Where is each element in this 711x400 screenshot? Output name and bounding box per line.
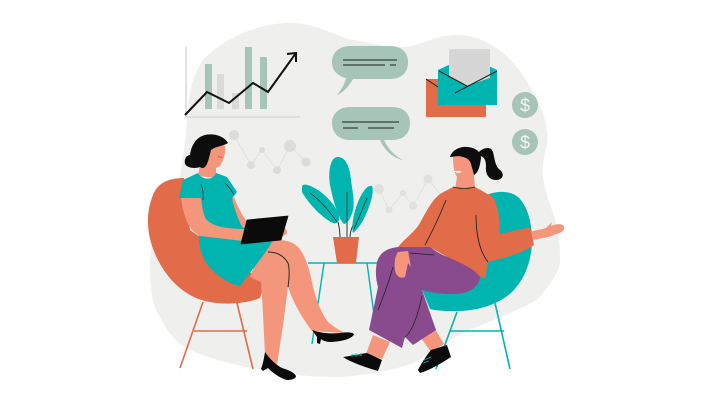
woman left: [179, 134, 354, 380]
mouth: [218, 156, 222, 157]
shoe front: [312, 330, 354, 344]
icon: dollar coin bottom: [512, 129, 538, 155]
neck and face: [453, 148, 477, 189]
laces: [352, 353, 431, 363]
icon: dollar coin top: [512, 92, 538, 118]
side table: [308, 263, 377, 344]
trousers: [369, 247, 480, 348]
icon: dollar coin bottom: $: [520, 132, 530, 152]
chair right: [420, 192, 532, 369]
hand: [278, 226, 287, 236]
faded dot chart right: [374, 174, 441, 214]
shoes: [343, 345, 451, 373]
envelope icon: [426, 49, 497, 117]
ponytail: [478, 148, 503, 180]
speech bubble top: [332, 46, 408, 95]
background blob: [150, 23, 560, 377]
front thigh and calf: [266, 240, 344, 333]
hand on knee: [395, 251, 411, 278]
neckline and sweater lines: [425, 187, 488, 262]
far arm: [232, 197, 249, 228]
dress top: [179, 173, 247, 236]
trouser lines: [378, 253, 434, 337]
hand gesture: [527, 222, 564, 240]
potted plant: [302, 157, 373, 263]
icon: dollar coin top: $: [520, 96, 530, 116]
sweater: [398, 187, 534, 279]
faded dot chart left: [229, 130, 310, 174]
neck and face: [198, 140, 225, 178]
hair: [450, 147, 481, 175]
tablet: [241, 216, 288, 244]
near arm: [181, 198, 247, 241]
shoe rear: [261, 352, 296, 380]
rear leg: [250, 246, 290, 365]
woman right: [343, 147, 564, 373]
smile: [454, 171, 462, 173]
knee crease: [268, 252, 289, 287]
bar chart with rising arrow: [185, 47, 300, 117]
speech bubble bottom: [332, 107, 410, 160]
hair: [185, 134, 228, 168]
skirt: [199, 222, 272, 286]
chair left: [148, 178, 262, 369]
lower legs: [366, 329, 444, 359]
